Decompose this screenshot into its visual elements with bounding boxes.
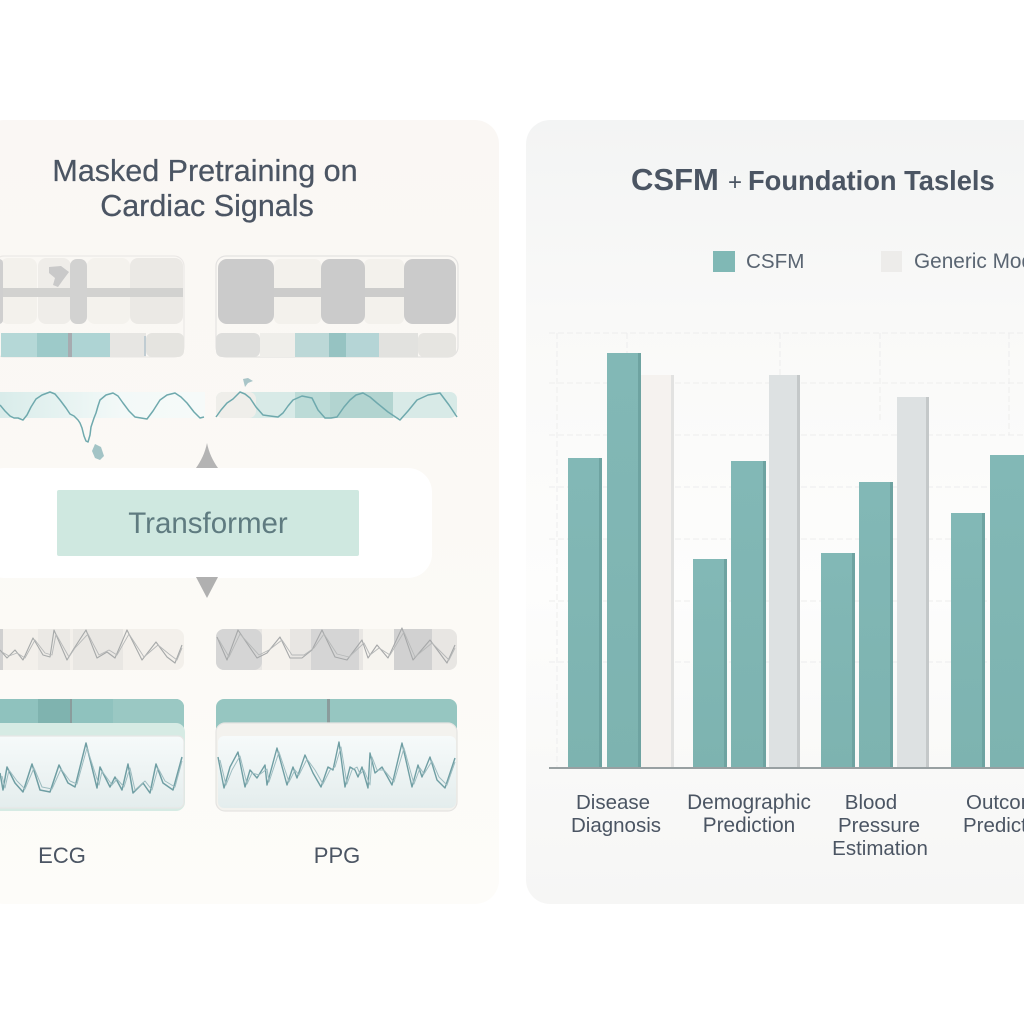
axis label: disease diagnosis: Disease <box>576 791 650 814</box>
arrow down <box>196 577 218 598</box>
legend: CSFM: CSFM <box>746 250 804 273</box>
axis label: blood pressure estimation: Pressure <box>838 814 920 837</box>
label: ECG: ECG <box>38 843 86 868</box>
bar group: disease diagnosis <box>568 353 674 768</box>
legend: CSFM <box>713 250 804 273</box>
ECG reconstructed waveform <box>0 699 185 811</box>
bar group: demographic prediction <box>693 375 800 768</box>
panel: masked pretraining <box>0 120 499 904</box>
transformer box <box>57 490 359 556</box>
axis label: demographic prediction: Prediction <box>703 814 795 837</box>
arrow up <box>196 443 218 468</box>
bar group: blood pressure estimation <box>821 397 929 768</box>
axis label: blood pressure estimation: Estimation <box>832 837 928 860</box>
heading: CSFM foundation tasks: CSFM <box>631 162 719 197</box>
transformer panel <box>0 468 432 578</box>
axis label: blood pressure estimation: Blood <box>845 791 897 814</box>
ECG masked patches <box>0 256 184 357</box>
axis label: disease diagnosis: Diagnosis <box>571 814 661 837</box>
axis label: demographic prediction: Demographic <box>687 791 811 814</box>
heading: CSFM foundation tasks: Foundation Taslels <box>748 165 995 196</box>
chart baseline <box>549 767 1024 769</box>
transformer box: Transformer <box>128 507 288 540</box>
heading: CSFM foundation tasks: + <box>728 169 742 196</box>
PPG masked waveform <box>216 378 457 420</box>
PPG masked patches <box>216 256 458 357</box>
heading: masked pretraining: Cardiac Signals <box>100 189 314 223</box>
ECG gray patched waveform <box>0 629 184 670</box>
panel: foundation tasks chart <box>526 120 1024 904</box>
heading: masked pretraining <box>52 154 358 223</box>
heading: masked pretraining: Masked Pretraining on <box>52 154 358 188</box>
label: PPG: PPG <box>314 843 360 868</box>
PPG reconstructed waveform <box>216 699 457 811</box>
bar group: outcome prediction <box>951 455 1024 768</box>
ECG masked waveform <box>0 392 205 460</box>
PPG gray patched waveform <box>216 628 457 670</box>
